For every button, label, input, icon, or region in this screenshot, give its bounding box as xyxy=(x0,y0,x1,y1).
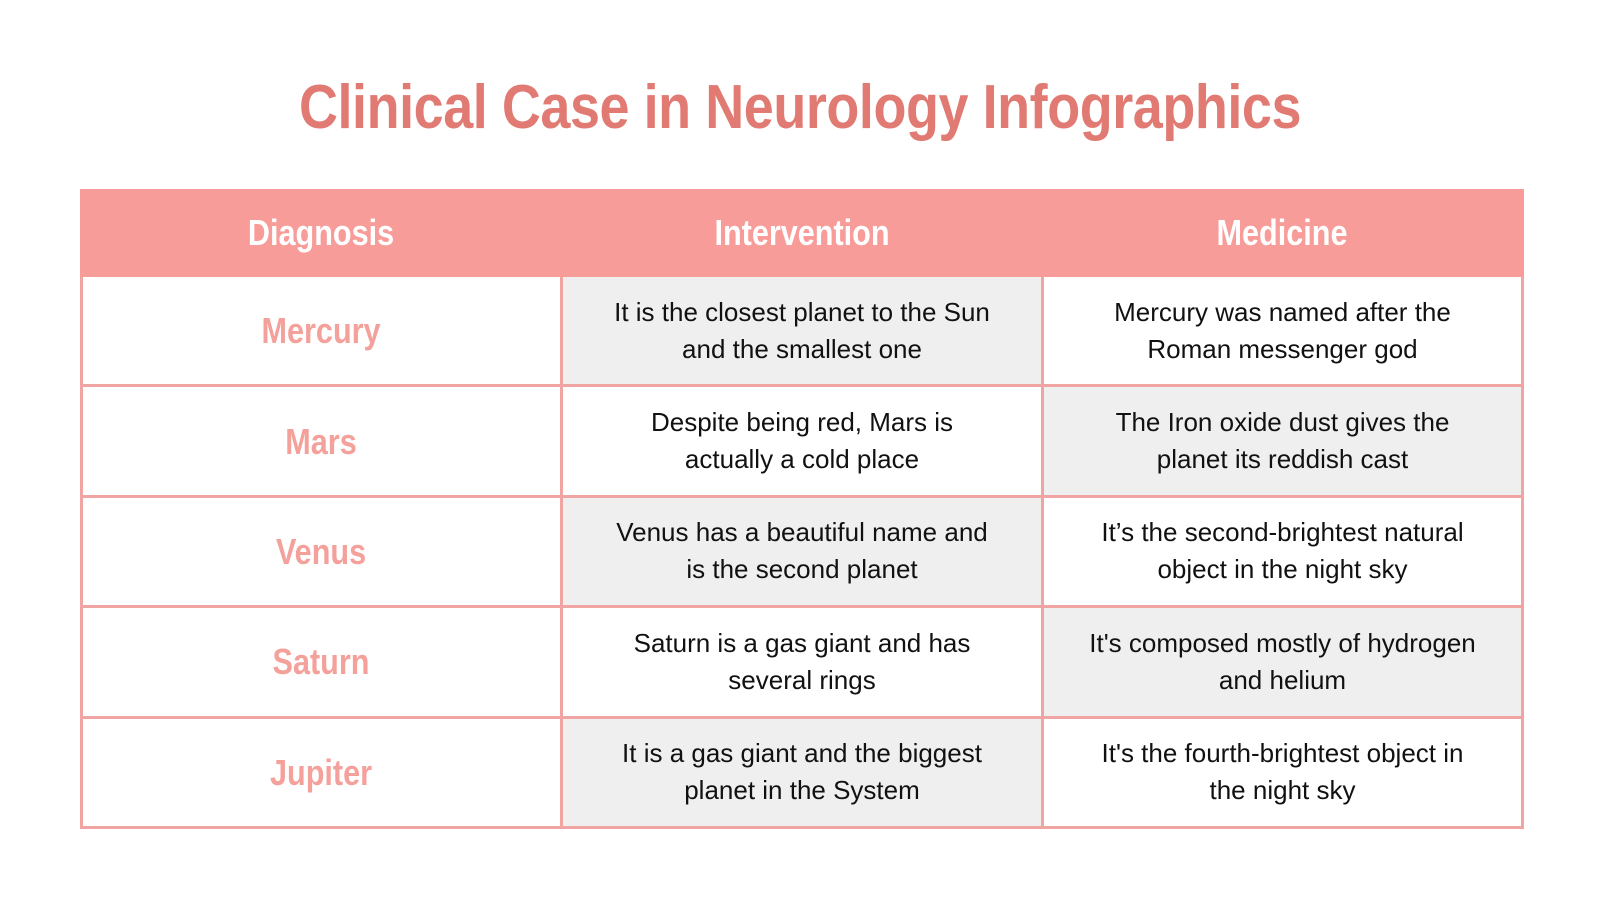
table: Venus xyxy=(276,531,367,572)
table: It is the closest planet to the Sun and the smallest one xyxy=(614,297,990,364)
table: Saturn is a gas giant and has several rings xyxy=(634,628,970,695)
table: Medicine xyxy=(1217,212,1348,253)
table xyxy=(80,189,1524,829)
table: Diagnosis xyxy=(248,212,395,253)
table: The Iron oxide dust gives the planet its reddish cast xyxy=(1116,407,1449,474)
table: It is a gas giant and the biggest planet in the System xyxy=(622,738,982,805)
table: Venus has a beautiful name and is the second planet xyxy=(616,517,988,584)
title: Clinical Case in Neurology Infographics xyxy=(299,73,1301,142)
table: It's composed mostly of hydrogen and helium xyxy=(1089,628,1476,695)
table: Jupiter xyxy=(270,752,373,793)
table: Mars xyxy=(286,421,357,462)
table: Saturn xyxy=(273,641,370,682)
table: It's the fourth-brightest object in the night sky xyxy=(1102,738,1463,805)
table: Mercury was named after the Roman messenger god xyxy=(1114,297,1451,364)
table: Mercury xyxy=(262,310,381,351)
table: Intervention xyxy=(714,212,890,253)
table: It’s the second-brightest natural object in the night sky xyxy=(1101,517,1464,584)
table: Despite being red, Mars is actually a cold place xyxy=(651,407,953,474)
